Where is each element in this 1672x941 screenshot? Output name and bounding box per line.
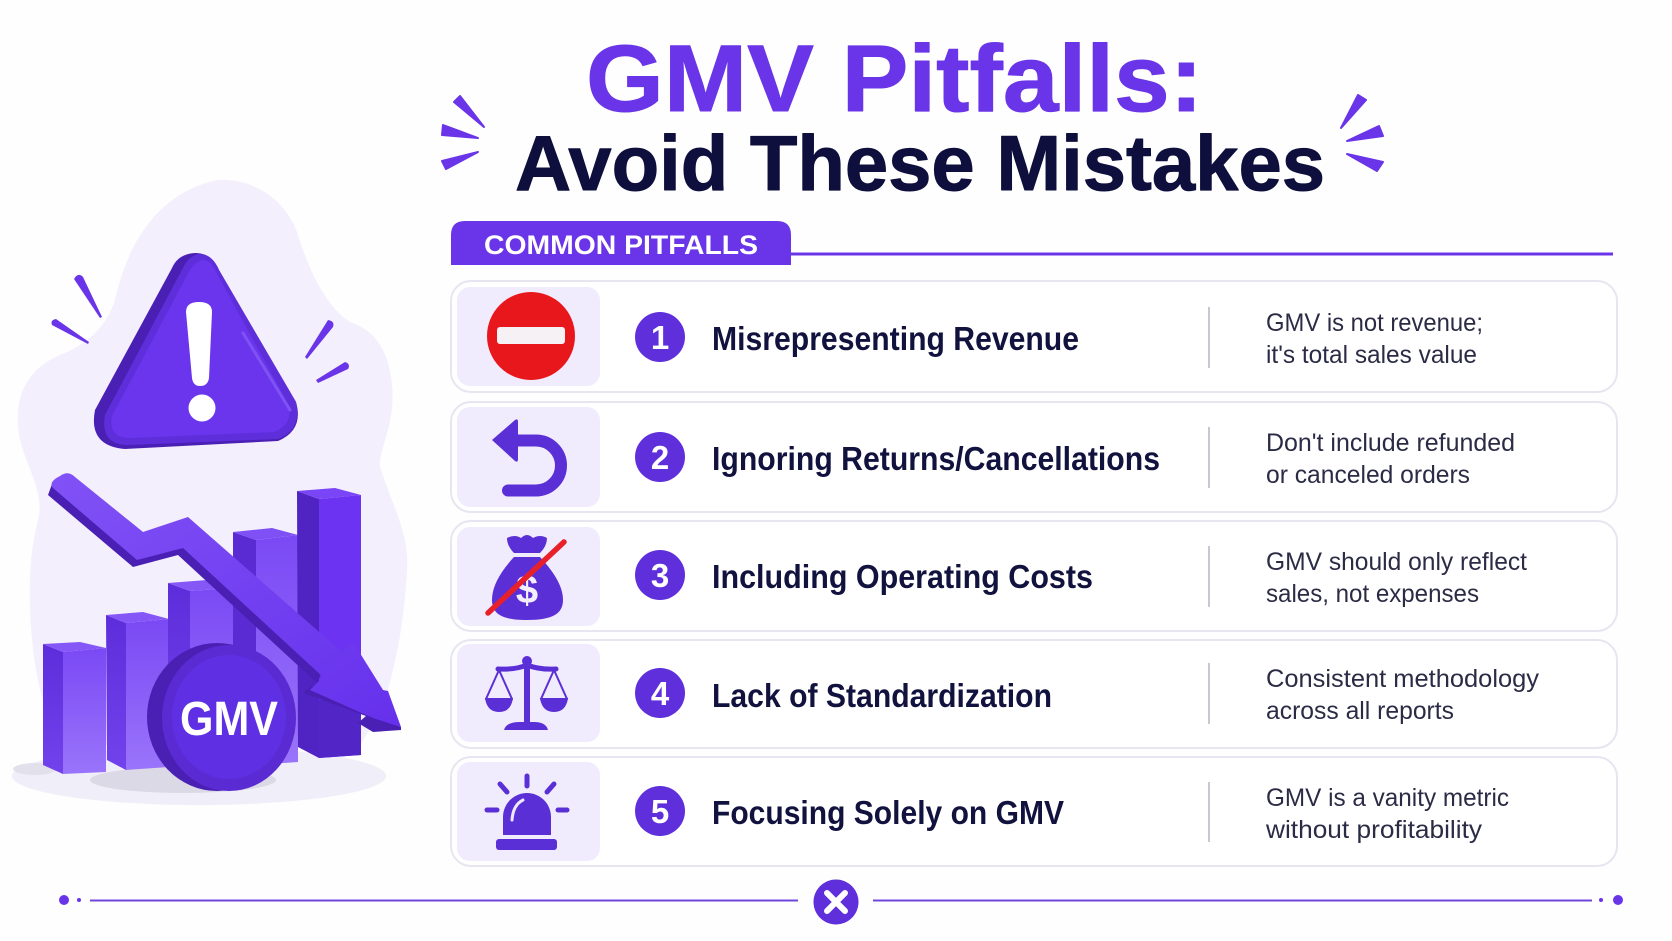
panel: pitfall 4 <box>451 640 1617 748</box>
title <box>515 26 1325 207</box>
heading 1: Misrepresenting Revenue <box>712 320 1079 357</box>
illustration: falling GMV chart with warning sign <box>12 180 407 805</box>
panel: pitfall 3 <box>451 521 1617 631</box>
panel: pitfall 5 <box>451 757 1617 866</box>
icon: crossed-out money bag: $ <box>516 568 538 612</box>
section header: common pitfalls: COMMON PITFALLS <box>484 230 758 260</box>
exclamation mark <box>186 302 212 386</box>
number 5: 5 <box>651 793 669 830</box>
bar 1 <box>43 642 106 774</box>
warning triangle <box>94 253 298 449</box>
bar 2 <box>106 612 169 770</box>
description 5: GMV is a vanity metric <box>1266 784 1509 812</box>
heading 2: Ignoring Returns/Cancellations <box>712 440 1160 477</box>
heading 5: Focusing Solely on GMV <box>712 794 1064 831</box>
icon: alarm siren <box>487 776 567 850</box>
heading 3: Including Operating Costs <box>712 558 1093 595</box>
description 4: Consistent methodology <box>1266 665 1540 693</box>
heading 4: Lack of Standardization <box>712 677 1052 714</box>
number 4 <box>635 668 685 718</box>
bar 5 <box>297 488 361 758</box>
description 3: GMV should only reflect <box>1266 548 1527 576</box>
bar chart <box>43 488 361 774</box>
GMV coin <box>147 643 296 791</box>
number 3: 3 <box>651 557 669 594</box>
number 2: 2 <box>651 439 669 476</box>
icon: balance scales <box>485 656 568 730</box>
number 3 <box>635 550 685 600</box>
number 5 <box>635 786 685 836</box>
icon: crossed-out money bag <box>488 535 564 620</box>
number 4: 4 <box>651 675 670 712</box>
number 1: 1 <box>651 319 669 356</box>
alert sparks <box>52 275 349 383</box>
title: GMV Pitfalls: <box>586 26 1203 132</box>
GMV coin: GMV <box>180 693 278 746</box>
description 2: or canceled orders <box>1266 461 1470 489</box>
bar 4 <box>233 528 298 765</box>
ground shadow <box>12 747 386 805</box>
number 2 <box>635 432 685 482</box>
footer divider with x icon <box>59 880 1623 924</box>
icon: no entry sign <box>487 292 575 380</box>
section header: common pitfalls <box>451 221 1613 265</box>
title sparks left <box>442 96 484 169</box>
title sparks right <box>1341 95 1383 171</box>
description 1: it's total sales value <box>1266 341 1477 369</box>
panel: pitfall 2 <box>451 402 1617 512</box>
description 2: Don't include refunded <box>1266 429 1515 457</box>
title: Avoid These Mistakes <box>515 119 1325 207</box>
background blob <box>18 180 407 745</box>
description 4: across all reports <box>1266 697 1454 725</box>
description 3: sales, not expenses <box>1266 580 1479 608</box>
bar 3 <box>168 580 233 765</box>
description 5: without profitability <box>1265 816 1483 844</box>
icon: x badge <box>814 880 858 924</box>
description 1: GMV is not revenue; <box>1266 309 1483 337</box>
icon: return arrow <box>492 419 561 490</box>
number 1 <box>635 312 685 362</box>
panel: pitfall 1 <box>451 281 1617 392</box>
declining arrow <box>48 473 401 732</box>
